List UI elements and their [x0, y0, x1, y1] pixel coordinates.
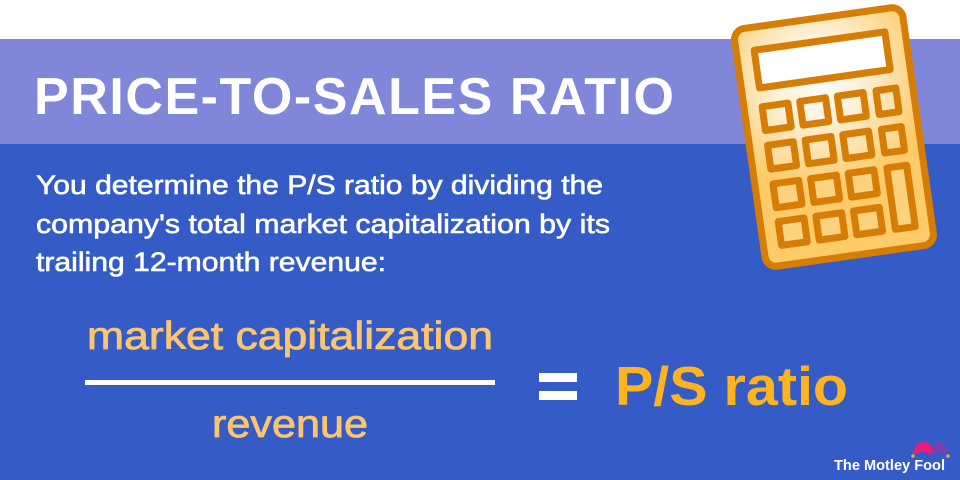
text block: explanation — [36, 170, 610, 277]
logo: The Motley Fool — [834, 442, 950, 474]
panel: title band — [0, 39, 960, 144]
text block: explanation: company's total market capitalization by its — [36, 209, 610, 239]
formula: fraction: revenue — [212, 403, 368, 446]
icon: jester hat — [911, 442, 950, 458]
logo: The Motley Fool: The Motley Fool — [834, 457, 945, 474]
formula result: P/S ratio — [615, 355, 848, 417]
panel: main blue background — [0, 144, 960, 480]
equals sign — [539, 373, 577, 400]
formula: fraction — [85, 315, 495, 446]
icon: calculator — [733, 6, 935, 268]
text block: explanation: You determine the P/S ratio by dividing the — [36, 170, 603, 200]
title: PRICE-TO-SALES RATIO — [34, 68, 674, 126]
text block: explanation: trailing 12-month revenue: — [36, 247, 386, 277]
formula: fraction: market capitalization — [87, 315, 493, 358]
